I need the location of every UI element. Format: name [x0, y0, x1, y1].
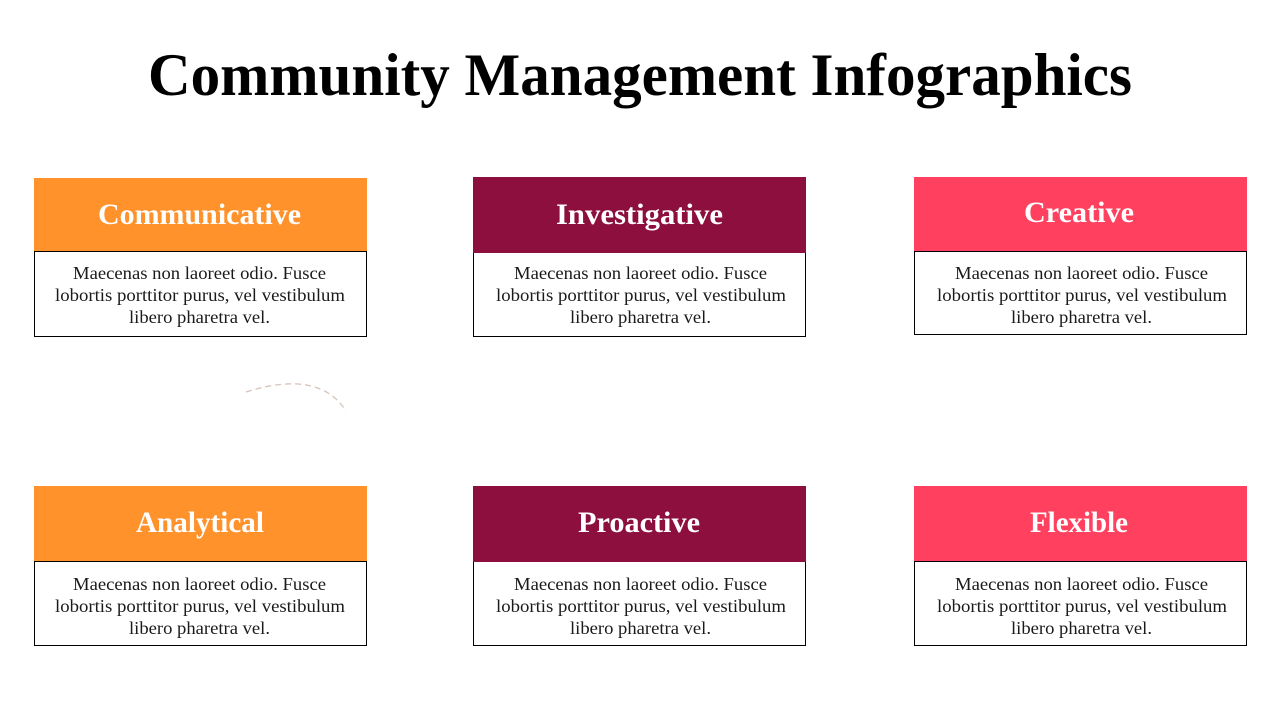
text block: Analytical [55, 574, 345, 638]
text block: Investigative: libero pharetra vel. [570, 307, 711, 327]
text block: Investigative: lobortis porttitor purus, vel vestibulum [496, 285, 786, 305]
text block: Flexible [937, 574, 1227, 638]
heading band: Communicative [34, 178, 367, 251]
text block: Proactive: Maecenas non laoreet odio. Fusce [514, 574, 767, 594]
text block: Creative [937, 263, 1227, 327]
heading band: Investigative [473, 177, 806, 253]
panel: Analytical [34, 486, 367, 646]
text block: Communicative: lobortis porttitor purus, vel vestibulum [55, 285, 345, 305]
text block: Proactive: lobortis porttitor purus, vel vestibulum [496, 596, 786, 616]
text block: Communicative: libero pharetra vel. [129, 307, 270, 327]
heading: Investigative: Investigative [556, 198, 723, 231]
panel: Communicative [34, 178, 367, 336]
text block: Creative: Maecenas non laoreet odio. Fusce [955, 263, 1208, 283]
heading band: Proactive [473, 486, 806, 562]
panel: Proactive [473, 486, 806, 646]
text block: Communicative [55, 263, 345, 327]
text block: Proactive: libero pharetra vel. [570, 618, 711, 638]
heading: Analytical: Analytical [136, 506, 264, 539]
dashed arc [246, 384, 346, 411]
text block: Creative: libero pharetra vel. [1011, 307, 1152, 327]
text block: Flexible: lobortis porttitor purus, vel vestibulum [937, 596, 1227, 616]
title: Community Management Infographics [148, 42, 1132, 108]
panel: Investigative [473, 177, 806, 336]
panel: Creative [914, 177, 1247, 334]
text block: Flexible: Maecenas non laoreet odio. Fusce [955, 574, 1208, 594]
heading: Proactive: Proactive [578, 506, 700, 539]
heading band: Flexible [914, 486, 1247, 561]
heading band: Analytical [34, 486, 367, 561]
text block: Analytical: libero pharetra vel. [129, 618, 270, 638]
text block: Analytical: Maecenas non laoreet odio. Fusce [73, 574, 326, 594]
text block: Flexible: libero pharetra vel. [1011, 618, 1152, 638]
heading: Flexible: Flexible [1030, 506, 1128, 539]
text block: Investigative [496, 263, 786, 327]
text block: Investigative: Maecenas non laoreet odio. Fusce [514, 263, 767, 283]
heading: Communicative: Communicative [98, 198, 301, 231]
text block: Communicative: Maecenas non laoreet odio. Fusce [73, 263, 326, 283]
heading band: Creative [914, 177, 1247, 251]
heading: Creative: Creative [1024, 196, 1134, 229]
text block: Creative: lobortis porttitor purus, vel vestibulum [937, 285, 1227, 305]
text block: Analytical: lobortis porttitor purus, vel vestibulum [55, 596, 345, 616]
text block: Proactive [496, 574, 786, 638]
panel: Flexible [914, 486, 1247, 646]
